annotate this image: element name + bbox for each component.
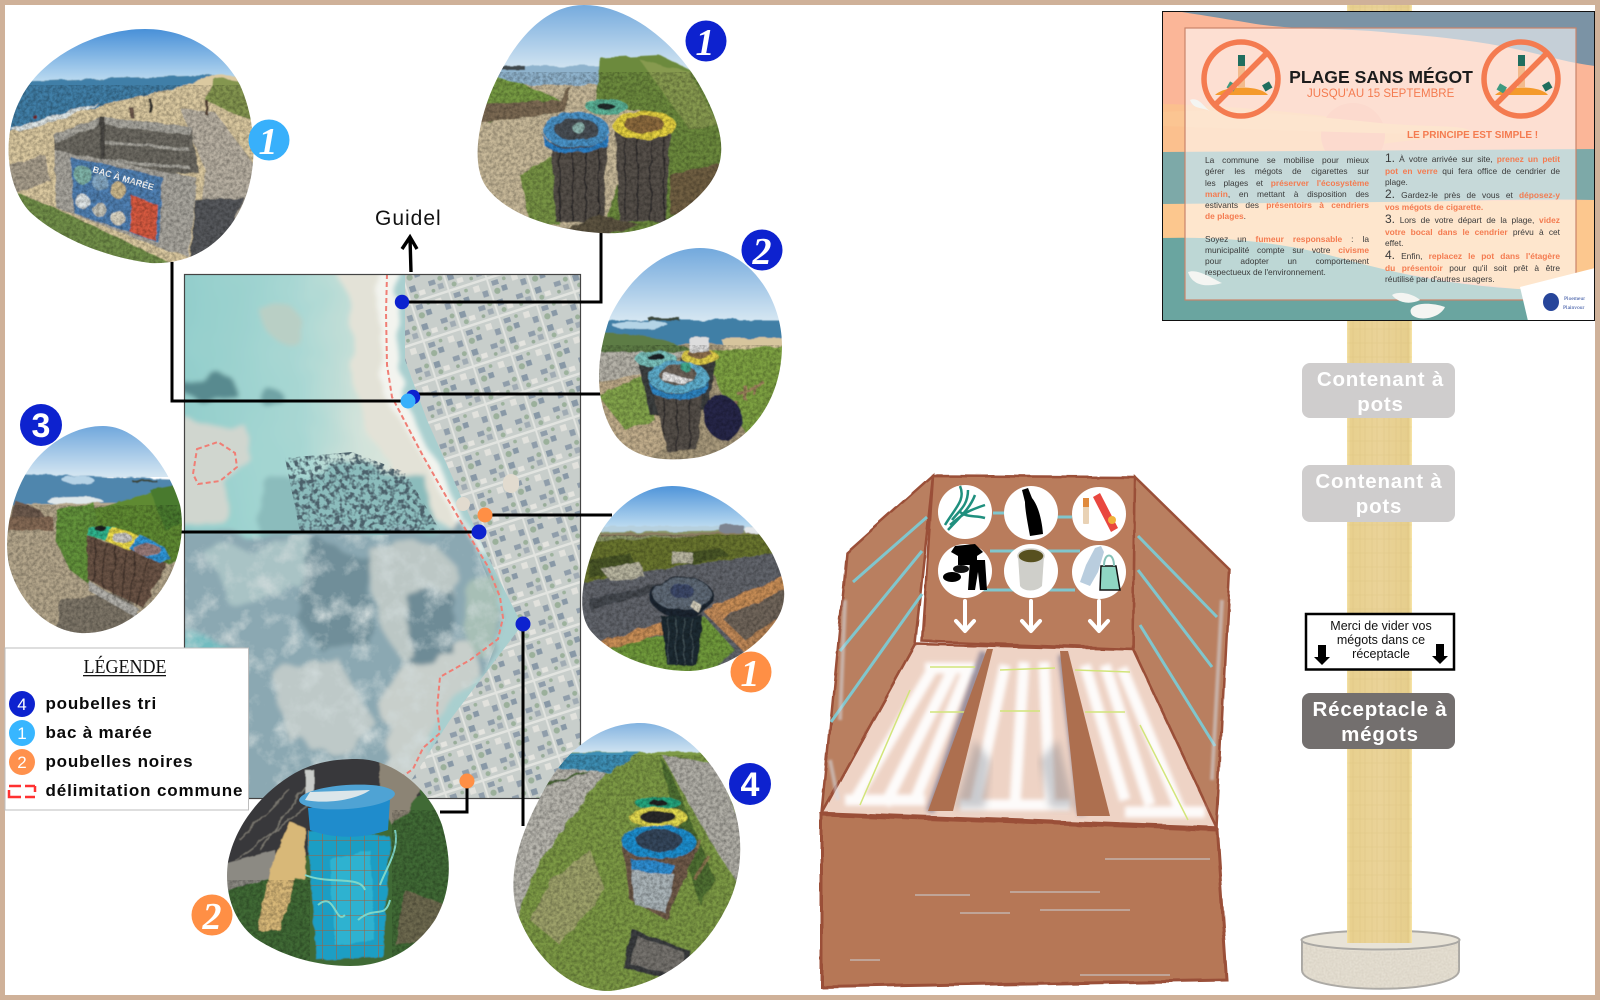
poster intro text: de plages. <box>1205 211 1246 221</box>
label: Guidel: Guidel <box>375 207 442 230</box>
poster subtitle: JUSQU'AU 15 SEPTEMBRE <box>1307 88 1454 100</box>
label box: réceptacle à mégots <box>1302 693 1455 749</box>
legend row: bac à marée: 1 <box>17 724 27 743</box>
label box: réceptacle à mégots: Réceptacle à <box>1313 698 1447 721</box>
poster subheading: LE PRINCIPE EST SIMPLE ! <box>1407 130 1538 141</box>
legend row: délimitation commune: délimitation commune <box>46 781 242 800</box>
arrows into the compartments <box>956 601 1108 631</box>
crate right wing <box>1133 477 1230 828</box>
badge: tri 1 <box>686 20 726 64</box>
label box: contenant à pots (upper): pots <box>1357 393 1404 416</box>
icon: plastic bottle and bag <box>1072 545 1126 599</box>
badge: poubelle noire 2 <box>192 894 232 938</box>
badge: tri 2 <box>742 230 782 273</box>
badge: tri 1: 1 <box>696 22 714 64</box>
poster intro text: La commune se mobilise pour mieux <box>1205 155 1369 165</box>
legend row: poubelles noires <box>9 749 193 775</box>
arrow to Guidel <box>402 237 417 272</box>
poster intro text: pour adopter un comportement <box>1205 256 1369 266</box>
badge: bac à marée 1: 1 <box>258 121 278 163</box>
poster numbered steps: 2. Gardez-le près de vous et déposez-y <box>1385 187 1560 201</box>
poster numbered steps: réutilisé par d'autres usagers. <box>1385 274 1495 284</box>
label box: contenant à pots (lower): Contenant à <box>1315 470 1443 493</box>
photo: black bin on the promenade <box>582 486 784 671</box>
legend panel <box>5 648 248 810</box>
poster: plage sans mégot: Plainvour <box>1563 305 1585 311</box>
label box: réceptacle à mégots: mégots <box>1341 723 1419 746</box>
badge: tri 4: 4 <box>741 766 760 804</box>
crate back panel <box>922 476 1135 649</box>
badge: poubelle noire 2: 2 <box>202 896 222 938</box>
photo: bins with black bag <box>599 248 782 460</box>
poster numbered steps <box>1385 151 1560 284</box>
poster intro text: Soyez un fumeur responsable : la <box>1205 234 1369 244</box>
poster numbered steps: 3. Lors de votre départ de la plage, videz <box>1385 212 1560 226</box>
poster intro text: municipalité compte sur votre civisme <box>1205 245 1369 255</box>
label box: contenant à pots (upper) <box>1302 363 1455 418</box>
poster numbered steps: vos mégots de cigarette. <box>1385 202 1483 212</box>
concrete post base <box>1302 925 1460 989</box>
badge: tri 2: 2 <box>752 231 772 273</box>
photo: sorting bin between two paths <box>513 723 740 991</box>
poster numbered steps: du présentoir pour qu'il soit prêt à être <box>1385 263 1560 273</box>
poster intro text: estivants des présentoirs à cendriers <box>1205 200 1369 210</box>
poster numbered steps: votre bocal dans le cendrier prévu à cet <box>1385 227 1560 237</box>
map: aerial view of the coast <box>185 275 580 798</box>
legend row: poubelles noires: 2 <box>17 753 27 772</box>
photo: bac à marée on the beach <box>8 29 254 264</box>
connector lines <box>172 232 612 826</box>
crate floor <box>822 644 1217 828</box>
badge: tri 4 <box>729 763 771 805</box>
poster: plage sans mégot: Ploemeur <box>1564 296 1585 302</box>
icon: fishing net <box>938 485 992 539</box>
badge: poubelle noire 1: 1 <box>740 653 760 695</box>
label box: contenant à pots (lower) <box>1302 465 1455 522</box>
illustration: open wooden crate <box>822 476 1230 987</box>
legend row: bac à marée <box>9 720 153 746</box>
poster intro text: respectueux de l'environnement. <box>1205 267 1326 277</box>
poster intro text <box>1205 155 1370 277</box>
badge: tri 3: 3 <box>32 407 50 445</box>
photo: long sorting bin above the sea <box>7 426 182 634</box>
label box: contenant à pots (upper): Contenant à <box>1317 368 1444 391</box>
legend row: poubelles tri: poubelles tri <box>46 694 157 713</box>
instruction sign: mégots dans ce <box>1337 633 1425 647</box>
legend row: bac à marée: bac à marée <box>46 723 153 742</box>
map markers <box>395 295 530 788</box>
poster numbered steps: plage. <box>1385 177 1408 187</box>
wooden post <box>1347 5 1412 943</box>
legend row: poubelles tri <box>9 691 157 717</box>
poster numbered steps: pot en verre qui fera office de cendrier de <box>1385 166 1560 176</box>
poster intro text: gérer les mégots de cigarettes sur <box>1205 166 1369 176</box>
poster numbered steps: effet. <box>1385 238 1403 248</box>
crate left wing <box>822 476 933 813</box>
poster intro text: marin, en mettant à disposition des <box>1205 189 1369 199</box>
poster numbered steps: 1. À votre arrivée sur site, prenez un petit <box>1385 151 1560 165</box>
icon: glass bottle <box>1004 486 1058 540</box>
badge: poubelle noire 1 <box>730 652 772 695</box>
poster: plage sans mégot <box>1162 11 1595 321</box>
legend row: poubelles tri: 4 <box>17 695 27 714</box>
instruction sign: Merci de vider vos <box>1330 619 1432 633</box>
icon: clothes and shoes <box>938 544 992 598</box>
photo: bac à marée on the beach: BAC À MARÉE <box>91 164 155 192</box>
poster intro text: les plages et préserver l'écosystème <box>1205 178 1369 188</box>
badge: bac à marée 1 <box>248 120 290 163</box>
instruction sign: réceptacle <box>1352 647 1410 661</box>
legend row: poubelles noires: poubelles noires <box>46 752 193 771</box>
commune boundary dashed line <box>193 274 503 776</box>
legend title: LÉGENDE <box>84 656 166 678</box>
icon: cigarette and packet <box>1072 487 1126 541</box>
poster title: PLAGE SANS MÉGOT <box>1289 67 1473 87</box>
crate front panel <box>822 815 1227 987</box>
badge: tri 3 <box>20 404 62 446</box>
instruction sign <box>1306 614 1454 670</box>
icon: tin can <box>1004 544 1058 598</box>
photo: bin with blue bag and wire mesh <box>227 759 449 966</box>
label box: contenant à pots (lower): pots <box>1356 495 1402 518</box>
poster numbered steps: 4. Enfin, replacez le pot dans l'étagère <box>1385 248 1560 262</box>
photo: three sorting bins on the dune path <box>478 5 722 234</box>
